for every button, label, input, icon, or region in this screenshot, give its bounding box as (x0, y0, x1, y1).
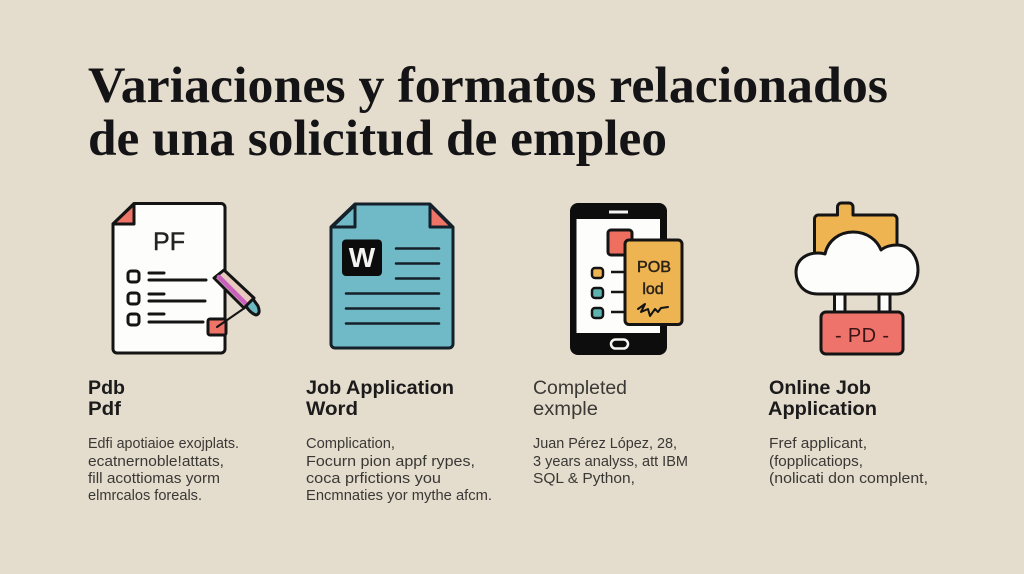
column 2 heading: Job Application (306, 378, 454, 399)
icon: Word document (331, 204, 453, 348)
column 2 body: Focurn pion appf rypes, (306, 454, 475, 470)
signature (638, 304, 668, 316)
checklist (128, 271, 206, 325)
speaker (609, 210, 628, 214)
orange card (625, 240, 682, 324)
column 1 body (88, 436, 239, 504)
cloud (796, 232, 918, 294)
title: Variaciones y formatos relacionados (88, 58, 888, 114)
column 4 heading: Application (768, 399, 877, 420)
column 3 body: Juan Pérez López, 28, (533, 436, 677, 452)
column 4 body: (fopplicatiops, (769, 454, 863, 470)
red tile (608, 230, 632, 255)
folded corner (113, 204, 134, 224)
column 1 body: ecatnernoble!attats, (88, 454, 224, 470)
orange card: POB (637, 259, 671, 276)
document label: PF (153, 228, 185, 256)
column 1 heading (88, 378, 125, 420)
column 1 body: elmrcalos foreals. (88, 488, 202, 504)
column 3 body (533, 436, 688, 487)
connector stems (834, 294, 890, 313)
column 2 heading: Word (306, 399, 358, 420)
right fold (430, 205, 452, 227)
orange folder (814, 203, 897, 256)
stamp square (208, 319, 226, 335)
column 4 text (768, 378, 928, 487)
Word badge (342, 240, 382, 276)
home button (611, 340, 628, 348)
column 4 heading (768, 378, 877, 420)
phone body (570, 203, 667, 355)
document sheet (331, 204, 453, 348)
column 2 text (306, 378, 492, 504)
column 1 text (88, 378, 239, 504)
icon: cloud application (796, 203, 918, 354)
column 2 body (306, 436, 492, 504)
column 1 heading: Pdb (88, 378, 125, 399)
icon: phone with card (570, 203, 682, 355)
column 2 body: coca prfictions you (306, 471, 441, 487)
title (88, 58, 888, 167)
document sheet (113, 204, 225, 353)
orange card: lod (642, 281, 664, 298)
red PD box: - PD - (835, 325, 889, 347)
column 1 body: fill acottiomas yorm (88, 471, 220, 487)
text lines (346, 248, 439, 324)
column 4 body: (nolicati don complent, (769, 471, 928, 487)
left fold (332, 205, 355, 227)
column 4 body (769, 436, 928, 487)
title: de una solicitud de empleo (88, 111, 667, 167)
column 4 body: Fref applicant, (769, 436, 867, 452)
icon: PDF form document with pencil (113, 204, 259, 353)
column 3 heading: Completed (533, 378, 627, 399)
column 2 body: Complication, (306, 436, 395, 452)
column 3 text (533, 378, 688, 487)
column 3 body: SQL & Python, (533, 471, 635, 487)
column 4 heading: Online Job (769, 378, 871, 399)
column 1 body: Edfi apotiaioe exojplats. (88, 436, 239, 452)
column 2 heading (306, 378, 454, 420)
column 2 body: Encmnaties yor mythe afcm. (306, 488, 492, 504)
column 1 heading: Pdf (88, 399, 122, 420)
red PD box (821, 312, 903, 354)
phone screen (576, 219, 660, 333)
Word badge: W (349, 242, 376, 273)
column 3 heading: exmple (533, 399, 598, 420)
list rows (592, 268, 630, 318)
column 3 body: 3 years analyss, att IBM (533, 454, 688, 470)
column 3 heading (533, 378, 627, 420)
pencil (214, 270, 259, 327)
